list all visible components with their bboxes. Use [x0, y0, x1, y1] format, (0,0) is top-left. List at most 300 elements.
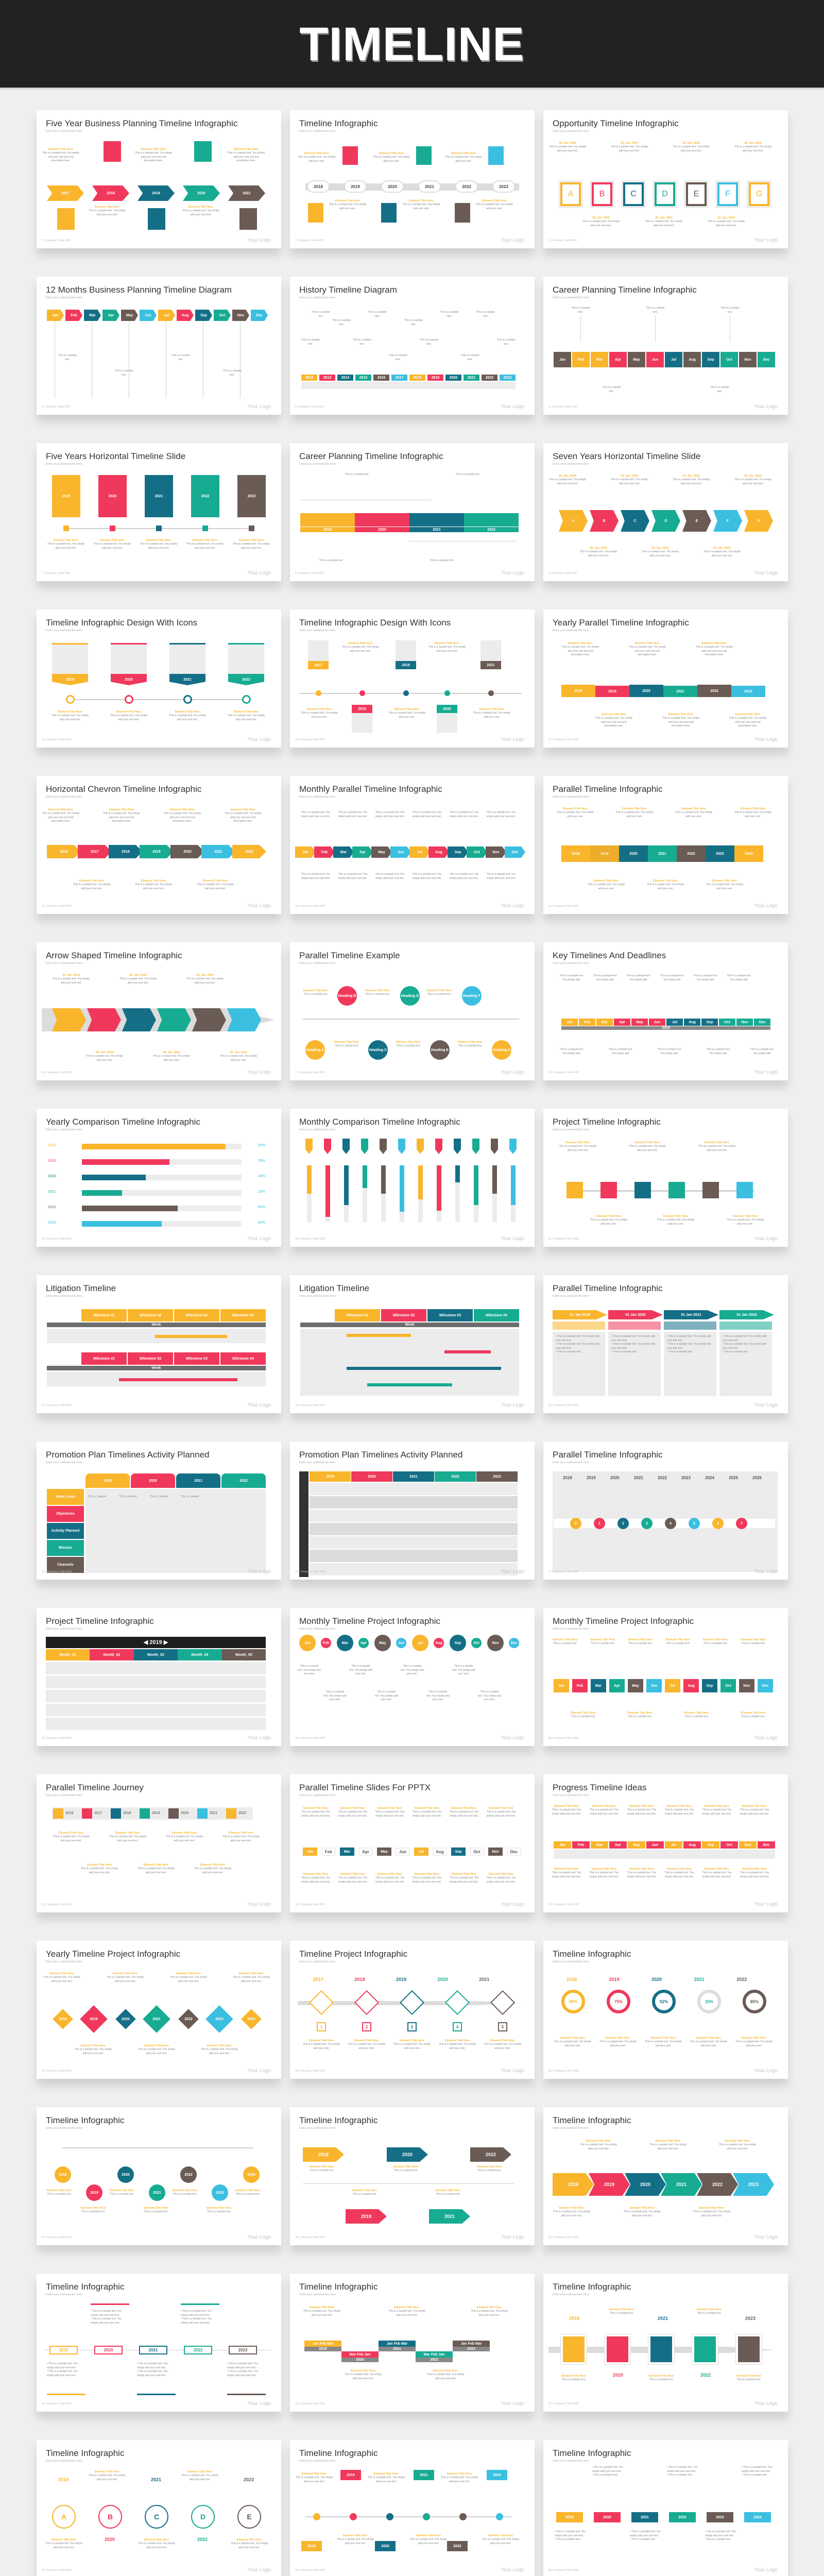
diamond markers on arrow graphic: 2017 2018 2019 2020 2021 [313, 1977, 489, 1982]
horizontal bar chart: 2022 [48, 1206, 56, 1209]
arrow strip graphic: 2022 [245, 850, 253, 853]
card: Timeline Infographic (years bar): Your Logo [501, 238, 524, 243]
lettered squares graphic: C [630, 190, 637, 198]
stepped month strip graphic: This is a sample text. You simply add your own text. [471, 2310, 508, 2317]
icon years strip graphic: Element Title Here [172, 1832, 197, 1835]
numbered circle timeline: 0 [575, 1522, 577, 1525]
gantt graphic: Milestone 01 [347, 1314, 368, 1317]
year bar timeline graphic: 2018 [314, 184, 323, 189]
card: Key Timelines And Deadlines: 18 | Company | Date 2020 [548, 1071, 578, 1074]
card: Litigation Timeline (two events) [37, 1275, 281, 1413]
alternating icon tags graphic: Element Title Here [435, 642, 459, 645]
alternating months graphic: Element Title Here [303, 1873, 328, 1876]
card: Timeline Infographic (outlined year boxes): Your Logo [248, 2401, 271, 2406]
month squares graphic: Element Title Here [684, 1711, 709, 1715]
month progress strip graphic: This is a sample text. You simply add your own text. [552, 1871, 581, 1878]
icon squares graphic: This is a sample text. You simply add your own text. [629, 1145, 666, 1152]
icon panels graphic [52, 643, 265, 721]
card: Timeline Project Infographic: 35 | Company | Date 2020 [295, 2070, 325, 2073]
monthly arrow strip graphic: This is a sample text. You simply add your own text. [375, 811, 404, 818]
gantt graphic: Milestone 03 [439, 1314, 461, 1317]
chevron timeline graphic: This is a sample text. You simply add your own text and description here. [42, 151, 79, 162]
card title: Timeline Infographic [553, 2282, 631, 2292]
monthly arrow strip graphic: Feb [321, 850, 328, 854]
monthly arrow strip graphic: Dec [512, 850, 518, 854]
year columns graphic: • This is a sample text. [630, 2538, 656, 2541]
month boxes deadline graphic: Jul [672, 1020, 677, 1024]
card: Seven Years Horizontal Timeline Slide: Your Logo [754, 570, 778, 576]
circle headings graphic: Element Title Here [427, 989, 452, 992]
card: Litigation Timeline (two events): 22 | Company | Date 2020 [42, 1404, 72, 1407]
month progress strip graphic: This is a sample text. You simply add your own text. [665, 1808, 694, 1816]
month boxes graphic: This is a sample text. [602, 386, 621, 393]
hanging circles graphic: 2022 [184, 2173, 193, 2176]
card title: Career Planning Timeline Infographic [553, 285, 697, 295]
arrow strip graphic: 2020 [183, 850, 192, 853]
stepped month strip graphic: 2022 [430, 2358, 438, 2362]
icon years strip graphic [52, 1807, 260, 1874]
card: Five Years Horizontal Timeline Slide [37, 443, 281, 581]
tall year panels graphic [47, 475, 270, 550]
month squares graphic: Apr [614, 1684, 620, 1688]
card: Parallel Timeline Journey: 31 | Company | Date 2020 [42, 1903, 72, 1906]
diamond markers on arrow graphic: Element Title Here [445, 2039, 470, 2042]
monthly arrow strip graphic: This is a sample text. You simply add your own text. [338, 811, 367, 818]
card: Timeline Infographic (numbered icon squares) [543, 2274, 788, 2412]
year columns graphic: • This is a sample text. You simply add your own text. [742, 2466, 772, 2473]
card: Career Planning Timeline Infographic: Your Logo [754, 404, 778, 410]
donut progress graphic: This is a sample text. You simply add your own. [599, 2040, 637, 2047]
lettered squares graphic: This is a sample text. You simply add your own text. [734, 145, 771, 152]
card title: Parallel Timeline Example [299, 951, 400, 960]
gantt graphic: Milestone 03 [186, 1314, 208, 1317]
card: Yearly Comparison Timeline Infographic: Enter your subhead line here [46, 1128, 82, 1131]
activity table: Activity Planned [52, 1529, 79, 1533]
hex block row graphic: 2018 [572, 852, 580, 855]
card: Timeline Infographic (stepped months): Your Logo [501, 2401, 524, 2406]
month boxes graphic: Jan [559, 358, 565, 362]
month boxes deadline graphic: This is a sample text. You simply add. [707, 1048, 730, 1055]
dot line with tag flags: Element Title Here [343, 2534, 368, 2537]
month boxes deadline graphic: This is a sample text. You simply add. [560, 1048, 583, 1055]
card: Timeline Infographic (numbered icon squares): Your Logo [754, 2401, 778, 2406]
month circles graphic: Apr [360, 1641, 367, 1645]
card: Parallel Timeline Infographic (numbered circles) [543, 1442, 788, 1580]
card: Yearly Parallel Timeline Infographic: 12 | Company | Date 2020 [548, 738, 578, 741]
dot line with tag flags: This is a sample text. You simply add your own text. [337, 2538, 374, 2545]
hex block row graphic: 2023 [716, 852, 724, 855]
card: Monthly Timeline Project Infographic (squares): Enter your subhead line here [553, 1628, 589, 1631]
icon years strip graphic: Element Title Here [144, 1863, 168, 1867]
alternating months graphic: Oct [473, 1850, 480, 1854]
circle headings graphic: Heading A [306, 1048, 324, 1052]
diamond markers on arrow graphic: Element Title Here [400, 2039, 424, 2042]
card title: Arrow Shaped Timeline Infographic [46, 951, 182, 960]
stepped month strip graphic: Element Title Here [433, 2369, 458, 2372]
year bar timeline graphic: This is a sample text. You simply add your own. [329, 203, 366, 210]
header arrows with columns: • This is a sample text. You simply add your own text. [611, 1335, 655, 1342]
diamonds graphic: This is a sample text. You simply add your own text. [75, 2048, 112, 2055]
icon years strip graphic: 2022 [238, 1811, 247, 1815]
gantt graphic: Milestone 03 [186, 1357, 208, 1360]
card title: Promotion Plan Timelines Activity Planned [46, 1450, 209, 1460]
chevron band graphic: Element Title Here [630, 2207, 655, 2210]
alternating months graphic: This is a sample text. You simply add your own text. [413, 1810, 441, 1818]
diamond markers on arrow graphic: 4 [456, 2025, 458, 2029]
seven chevrons graphic: 30, Jan, 2019 [590, 547, 607, 550]
month circles graphic: This is a sample text. You simply add your own. [426, 1690, 450, 1701]
quarter strip graphic: This is a sample text. [456, 473, 479, 476]
card: Timeline Infographic Design With Icons (alternating) [290, 609, 535, 748]
lettered circles graphic: D [200, 2513, 205, 2521]
monthly arrow strip graphic: This is a sample text. You simply add your own text. [375, 873, 404, 880]
history pins and year strip: 2017 [396, 376, 403, 379]
tall year panels graphic: This is a sample text. You simply add your own text. [140, 543, 177, 550]
circle headings graphic: Element Title Here [396, 1041, 421, 1044]
tall year panels graphic: 2021 [155, 495, 163, 498]
alternating months graphic: May [381, 1850, 388, 1854]
diamonds graphic: 2022 [184, 2018, 193, 2021]
card: Yearly Timeline Project Infographic: 34 | Company | Date 2020 [42, 2070, 72, 2073]
month progress strip graphic: This is a sample text. You simply add your own text. [590, 1808, 619, 1816]
hex block row graphic: Element Title Here [681, 807, 706, 810]
lettered squares graphic: D [662, 190, 668, 198]
stepped month strip graphic: Element Title Here [351, 2369, 375, 2372]
icon squares on arrow graphic: 2019 [569, 2316, 579, 2321]
chevron timeline graphic: This is a sample text. You simply add your own text. [89, 209, 126, 216]
alternating icon tags graphic: 2020 [443, 707, 451, 711]
arrow chevron graphic: 30, Jan, 2023 [230, 1051, 247, 1054]
card: Promotion Plan Timelines Activity Planned (table): Enter your subhead line here [46, 1461, 82, 1464]
outlined year boxes graphic: • This is a sample text. You simply add your own text. [137, 2370, 168, 2377]
quarter strip graphic [300, 473, 519, 562]
seven chevrons graphic: This is a sample text. You simply add your own text. [703, 550, 741, 557]
card title: Timeline Infographic [553, 1949, 631, 1959]
month circles graphic: This is a sample text. You simply add your own. [478, 1690, 501, 1701]
alternating months graphic: Element Title Here [340, 1873, 365, 1876]
seven chevrons graphic: G [757, 519, 760, 522]
chevron timeline graphic: 2018 [107, 192, 115, 195]
circle headings graphic: Element Title Here [458, 1041, 483, 1044]
flag markers graphic: 2022 [486, 2151, 496, 2157]
seven chevrons graphic: 30, Jan, 2018 [559, 474, 576, 478]
seven chevrons graphic: This is a sample text. You simply add your own text. [673, 478, 710, 485]
hanging circles graphic: Element Title Here [47, 2189, 72, 2192]
hex block row graphic: Element Title Here [712, 879, 737, 883]
alternating icon tags graphic: This is a sample text. You simply add your own text. [428, 646, 466, 653]
lettered squares graphic: This is a sample text. You simply add your own text. [645, 220, 682, 227]
flag markers graphic: This is a sample text. [353, 2193, 376, 2196]
gantt graphic: Week [405, 1323, 415, 1327]
alternating months graphic: Element Title Here [377, 1807, 402, 1810]
donut progress graphic: 90% [569, 1999, 577, 2004]
alternating months graphic: This is a sample text. You simply add your own text. [487, 1810, 516, 1818]
month progress strip graphic: Element Title Here [705, 1805, 729, 1808]
tall year panels graphic: Element Title Here [54, 539, 78, 542]
icon years strip graphic: 2016 [65, 1811, 74, 1815]
month squares graphic: Element Title Here [741, 1638, 765, 1641]
lettered circles graphic: C [154, 2513, 159, 2521]
icon squares on arrow graphic: Element Title Here [697, 2308, 722, 2311]
quarter strip graphic: This is a sample text. [345, 473, 369, 476]
card: Timeline Infographic (A-E circles) [37, 2440, 281, 2576]
donut progress graphic: 75% [614, 1999, 623, 2004]
card title: Key Timelines And Deadlines [553, 951, 666, 960]
chevron band graphic [553, 2140, 774, 2217]
month progress strip graphic: Element Title Here [667, 1868, 692, 1871]
card title: Timeline Infographic [299, 118, 377, 128]
numbered circle timeline: 7 [741, 1522, 743, 1525]
month progress strip graphic: Jun [652, 1843, 658, 1846]
header arrows with columns: 01 Jan 2019 [570, 1313, 590, 1317]
diamonds graphic: Element Title Here [81, 2044, 106, 2047]
card title: Project Timeline Infographic [553, 1117, 661, 1127]
alternating months graphic: This is a sample text. You simply add your own text. [413, 1876, 441, 1884]
hex block row graphic: Element Title Here [563, 807, 588, 810]
history pins and year strip: This is a sample text. [312, 311, 330, 317]
card: Timeline Infographic (donut percentages): Your Logo [754, 2068, 778, 2074]
card: Parallel Timeline Slides For PPTX [290, 1774, 535, 1912]
history pins and year strip: 2019 [432, 376, 439, 379]
month squares graphic: This is a sample text. [628, 1715, 652, 1718]
month boxes deadline graphic: 2019 [662, 1026, 670, 1030]
card: 12 Months Business Planning Timeline Diagram: Your Logo [248, 404, 271, 410]
card: Yearly Parallel Timeline Infographic: Your Logo [754, 737, 778, 742]
hex block row graphic: 2022 [687, 852, 695, 855]
card: Project Timeline Infographic (squares) [543, 1109, 788, 1247]
alternating months graphic: Jun [399, 1850, 406, 1854]
card: Career Planning Timeline Infographic: 6 | Company | Date 2020 [548, 405, 577, 409]
diamonds graphic: 2021 [152, 2018, 161, 2021]
diamonds graphic: 2020 [122, 2018, 130, 2021]
month boxes deadline graphic: Jun [654, 1020, 660, 1024]
icon years strip graphic: Element Title Here [59, 1832, 83, 1835]
circle headings graphic: Heading D [401, 994, 419, 997]
alternating months graphic: Element Title Here [415, 1873, 439, 1876]
card: Career Planning Timeline Infographic: Enter your subhead line here [553, 296, 589, 299]
lettered squares graphic: 30, Jan, 2023 [682, 142, 700, 145]
card title: Timeline Infographic Design With Icons [299, 618, 451, 628]
ribbon graphic: Element Title Here [668, 713, 693, 716]
arrow chevron graphic: This is a sample text. You simply add your own text. [53, 977, 90, 985]
card: Parallel Timeline Infographic (columns): Your Logo [754, 1402, 778, 1408]
year columns graphic: • This is a sample text. You simply add your own text. [705, 2530, 736, 2537]
diamonds graphic: This is a sample text. You simply add your own text. [201, 2048, 238, 2055]
month circles graphic: Dec [511, 1641, 517, 1645]
dot line with tag flags: Element Title Here [447, 2472, 472, 2476]
card title: Timeline Infographic [46, 2448, 124, 2458]
month progress strip graphic: Sep [708, 1843, 714, 1846]
dark striped table: 2019 [326, 1475, 334, 1479]
card title: Project Timeline Infographic [46, 1616, 154, 1626]
month boxes graphic: Apr [615, 358, 621, 362]
card: Project Timeline Infographic (squares): Your Logo [754, 1236, 778, 1242]
card title: History Timeline Diagram [299, 285, 397, 295]
card: Career Planning Timeline Infographic (quarters) [290, 443, 535, 581]
month boxes deadline graphic: May [636, 1020, 643, 1024]
lettered squares graphic: 30, Jan, 2022 [655, 216, 673, 219]
month progress strip graphic: Element Title Here [742, 1868, 767, 1871]
card: Timeline Infographic (flags): 38 | Company | Date 2020 [295, 2236, 325, 2239]
alternating icon tags graphic [299, 640, 522, 733]
activity table: 2019 [104, 1479, 112, 1483]
stepped month strip graphic: 2019 [319, 2347, 327, 2351]
dot line with tag flags: Element Title Here [302, 2472, 327, 2476]
ribbon graphic: This is a sample text. You simply add your own text and description here. [595, 717, 632, 727]
card: Five Year Business Planning Timeline Infographic: Enter your subhead line here [46, 130, 82, 133]
card: Career Planning Timeline Infographic (quarters): Your Logo [501, 570, 524, 576]
diamonds graphic: Element Title Here [113, 1972, 138, 1975]
arrow chevron graphic: 30, Jan, 2021 [163, 1051, 180, 1054]
alternating icon tags graphic: Element Title Here [348, 642, 373, 645]
card: Timeline Infographic Design With Icons (panels): 10 | Company | Date 2020 [42, 738, 72, 741]
month boxes deadline graphic: Dec [759, 1020, 765, 1024]
arrow strip graphic: 2021 [214, 850, 222, 853]
hex block row graphic [557, 807, 771, 890]
month boxes graphic: Mar [596, 358, 603, 362]
card: Parallel Timeline Infographic (columns) [543, 1275, 788, 1413]
outlined year boxes graphic: 2020 [104, 2348, 113, 2352]
monthly arrows graphic: Dec [256, 313, 263, 317]
card: Horizontal Chevron Timeline Infographic [37, 776, 281, 914]
month boxes deadline graphic: Feb [584, 1020, 590, 1024]
month progress strip graphic: Element Title Here [592, 1868, 616, 1871]
history pins and year strip: 2013 [323, 376, 331, 379]
horizontal bar chart: 60% [258, 1206, 265, 1209]
month circles graphic: Nov [492, 1641, 499, 1645]
chevron band graphic: This is a sample text. You simply add your own text. [553, 2210, 590, 2217]
card title: Timeline Infographic [553, 2448, 631, 2458]
stepped month strip graphic: This is a sample text. You simply add your own text. [388, 2310, 425, 2317]
chevron timeline graphic: Element Title Here [234, 148, 259, 151]
alternating icon tags graphic: 2021 [487, 664, 495, 667]
gantt graphic: Milestone 04 [232, 1314, 254, 1317]
dot line with tag flags: This is a sample text. You simply add your own text. [482, 2538, 519, 2545]
arrow chevron graphic: This is a sample text. You simply add your own. [153, 1055, 190, 1062]
icon years strip graphic: This is a sample text. You simply add your own text. [166, 1835, 203, 1842]
diamonds graphic: This is a sample text. You simply add your own text. [107, 1976, 144, 1983]
diamond markers on arrow graphic: This is a sample text. You simply add your own. [393, 2043, 431, 2050]
card: Seven Years Horizontal Timeline Slide: Enter your subhead line here [553, 463, 589, 466]
alternating months graphic [301, 1807, 521, 1884]
card: Progress Timeline Ideas: 33 | Company | Date 2020 [548, 1903, 578, 1906]
month boxes graphic: This is a sample text. [720, 307, 740, 313]
diamonds graphic: 2024 [247, 2018, 255, 2021]
history pins and year strip: 2016 [377, 376, 385, 379]
icon years strip graphic: This is a sample text. You simply add your own text. [109, 1835, 146, 1842]
card: Timeline Infographic (dot line with tags): 44 | Company | Date 2020 [295, 2569, 325, 2572]
month progress strip graphic: This is a sample text. You simply add your own text. [590, 1871, 619, 1878]
month squares graphic: This is a sample text. [553, 1642, 577, 1645]
hex block row graphic: 2019 [600, 852, 609, 855]
quarter strip graphic: This is a sample text. [319, 559, 343, 562]
month circles graphic: This is a sample text. You simply add your own. [401, 1665, 424, 1675]
gantt graphic [300, 1309, 519, 1396]
card: Timeline Infographic Design With Icons (panels): Enter your subhead line here [46, 629, 82, 632]
donut progress graphic: 2018 2019 2020 2021 2022 [566, 1977, 747, 1982]
card: Horizontal Chevron Timeline Infographic: Enter your subhead line here [46, 795, 82, 799]
month squares graphic: This is a sample text. [684, 1715, 709, 1718]
card: Parallel Timeline Example [290, 942, 535, 1080]
icon squares on arrow graphic: 2020 [613, 2372, 623, 2378]
card: Key Timelines And Deadlines: Enter your subhead line here [553, 962, 589, 965]
year columns graphic: • This is a sample text. [555, 2538, 580, 2541]
horizontal bar chart: 2018 [48, 1144, 56, 1147]
card: Key Timelines And Deadlines: Your Logo [754, 1070, 778, 1075]
icon squares on arrow graphic: Element Title Here [609, 2308, 634, 2311]
card: Timeline Infographic (dot line with tags): Enter your subhead line here [299, 2460, 336, 2463]
card: Timeline Infographic (year columns) [543, 2440, 788, 2576]
stepped month strip graphic: Mar Feb Jan [350, 2352, 370, 2357]
diamonds graphic: This is a sample text. You simply add your own text. [43, 1976, 80, 1983]
flag markers graphic: 2019 [361, 2213, 371, 2218]
monthly arrows graphic: Feb [71, 313, 77, 317]
card title: 12 Months Business Planning Timeline Diagram [46, 285, 232, 295]
chevron band graphic: 2020 [640, 2181, 650, 2187]
icon years strip graphic: 2019 [152, 1811, 160, 1815]
ribbon graphic: This is a sample text. You simply add your own text and description here. [729, 717, 766, 727]
card: Monthly Timeline Project Infographic (squares): Your Logo [754, 1735, 778, 1741]
arrow strip graphic: 2019 [152, 850, 161, 853]
ribbon graphic: 2022 [710, 689, 718, 692]
month boxes graphic: Nov [744, 358, 751, 362]
year bar timeline graphic: Element Title Here [304, 152, 329, 155]
dot line with tag flags: 2018 [307, 2544, 316, 2548]
month squares graphic: Element Title Here [571, 1711, 595, 1715]
seven chevrons graphic: 30, Jan, 2020 [621, 474, 638, 478]
arrow strip graphic: 2018 [122, 850, 130, 853]
stepped month strip graphic: Jan Feb Mar [313, 2342, 333, 2345]
diamond markers on arrow graphic: This is a sample text. You simply add your own. [484, 2043, 521, 2050]
card: Parallel Timeline Example: 17 | Company | Date 2020 [295, 1071, 325, 1074]
lettered squares graphic [549, 142, 771, 227]
month boxes deadline graphic: This is a sample text. You simply add. [750, 1048, 774, 1055]
quarter strip graphic: 2019 [323, 528, 332, 532]
monthly arrow strip graphic: This is a sample text. You simply add your own text. [450, 811, 478, 818]
hanging circles graphic: 2021 [153, 2191, 161, 2195]
alternating months graphic: Feb [325, 1850, 332, 1854]
icon squares on arrow graphic: 2021 [658, 2316, 668, 2321]
tall year panels graphic: This is a sample text. You simply add your own text. [233, 543, 270, 550]
card: Timeline Infographic (outlined year boxes): 40 | Company | Date 2020 [42, 2402, 72, 2405]
month progress strip graphic: This is a sample text. You simply add your own text. [552, 1808, 581, 1816]
card: Five Year Business Planning Timeline Infographic: 1 | Company | Date 2020 [42, 239, 70, 242]
dot line with tag flags: Element Title Here [416, 2534, 441, 2537]
outlined year boxes graphic: • This is a sample text. You simply add your own text. [181, 2310, 212, 2316]
month circles graphic: This is a sample text. You simply add your own. [375, 1690, 398, 1701]
card: Five Year Business Planning Timeline Infographic: Your Logo [248, 238, 271, 243]
card: Yearly Parallel Timeline Infographic [543, 609, 788, 748]
chevron timeline graphic: 2020 [197, 192, 205, 195]
outlined year boxes graphic: • This is a sample text. You simply add your own text. [137, 2362, 168, 2369]
month progress strip graphic: Element Title Here [554, 1868, 579, 1871]
ribbon graphic: 2023 [744, 689, 752, 693]
card: Timeline Infographic (donut percentages): 36 | Company | Date 2020 [548, 2070, 578, 2073]
monthly arrow strip graphic: This is a sample text. You simply add your own text. [413, 811, 441, 818]
month boxes deadline graphic: This is a sample text. You simply add. [658, 1048, 681, 1055]
year bar timeline graphic: This is a sample text. You simply add your own. [445, 156, 482, 163]
icon squares on arrow graphic [548, 2308, 774, 2381]
alternating icon tags graphic: Element Title Here [479, 708, 504, 711]
year columns graphic: • This is a sample text. You simply add your own text. [667, 2466, 698, 2473]
seven chevrons graphic [549, 474, 773, 557]
horizontal bar chart: 40% [258, 1175, 265, 1178]
donut progress graphic [554, 1977, 772, 2047]
numbered circle timeline: 4 [670, 1522, 672, 1525]
alternating months graphic: This is a sample text. You simply add your own text. [487, 1876, 516, 1884]
chevron band graphic: 2023 [748, 2181, 759, 2187]
icon squares on arrow graphic: This is a sample text. [697, 2312, 721, 2315]
